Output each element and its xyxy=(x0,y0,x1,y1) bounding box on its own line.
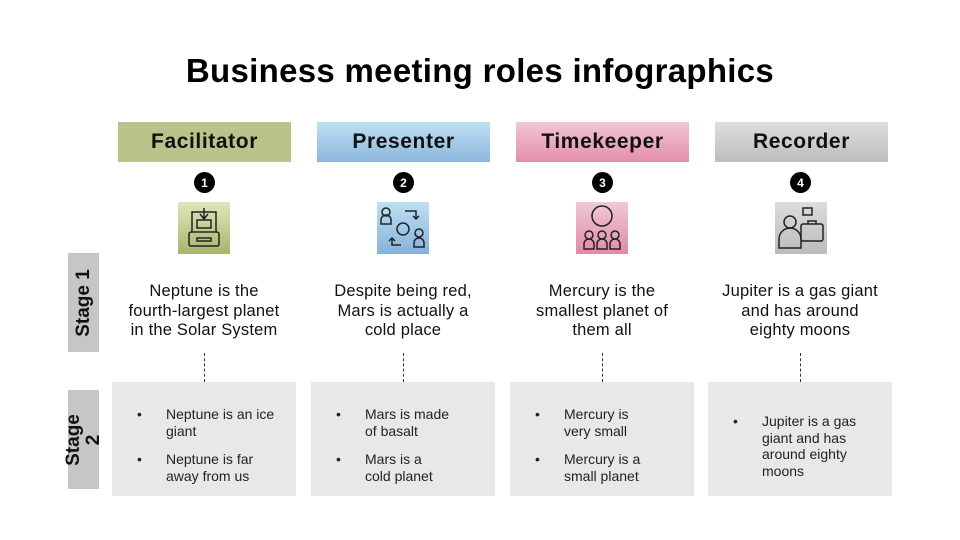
number 1 xyxy=(194,172,215,193)
stage 2 box: Timekeeper: small planet xyxy=(564,468,639,484)
stage 2 box: Timekeeper xyxy=(510,382,694,496)
stage 2 box: Timekeeper: Mercury is a xyxy=(564,451,640,467)
stage 1 label xyxy=(68,253,99,352)
header: Timekeeper xyxy=(516,122,689,162)
stage 2 box: Presenter: Mars is made xyxy=(365,406,449,422)
header: Facilitator xyxy=(118,122,291,162)
stage 2 box: Recorder: giant and has xyxy=(762,430,846,446)
stage 2 box: Presenter: cold planet xyxy=(365,468,433,484)
stage 2 box: Recorder: around eighty xyxy=(762,446,847,462)
stage 2 box: Facilitator xyxy=(112,382,296,496)
stage 2 box: Recorder xyxy=(708,382,892,496)
stage 1 text: Facilitator: Neptune is the xyxy=(149,282,259,300)
stage 1 text: Facilitator: fourth-largest planet xyxy=(129,302,279,320)
stage 1 text: Presenter: cold place xyxy=(365,321,441,339)
number 2 xyxy=(393,172,414,193)
stage 1 text: Presenter: Mars is actually a xyxy=(337,302,469,320)
stage 2 box: Facilitator: Neptune is an ice xyxy=(166,406,274,422)
stage 2 box: Facilitator: away from us xyxy=(166,468,249,484)
stage 2 box: Facilitator: Neptune is far xyxy=(166,451,253,467)
header: Presenter: Presenter xyxy=(352,130,455,153)
header: Recorder: Recorder xyxy=(753,130,850,153)
number 1: 1 xyxy=(201,176,208,190)
stage 1 text: Facilitator xyxy=(128,282,280,339)
number 4 xyxy=(790,172,811,193)
stage 2 box: Recorder: Jupiter is a gas xyxy=(762,413,856,429)
number 3: 3 xyxy=(599,176,606,190)
stage 2 label: 2 xyxy=(82,434,104,445)
icon: inbox tray xyxy=(178,202,230,254)
number 3 xyxy=(592,172,613,193)
icon: exchange people xyxy=(377,202,429,254)
title: Business meeting roles infographics xyxy=(186,52,774,89)
icon: recorder with briefcase xyxy=(775,202,827,254)
stage 1 text: Recorder xyxy=(722,282,878,339)
stage 1 label: Stage 1 xyxy=(72,269,94,336)
number 4: 4 xyxy=(797,176,804,190)
header: Recorder xyxy=(715,122,888,162)
header: Facilitator: Facilitator xyxy=(151,130,258,153)
stage 1 text: Timekeeper: smallest planet of xyxy=(536,302,668,320)
stage 2 box: Timekeeper: very small xyxy=(564,422,627,438)
stage 2 box: Facilitator: giant xyxy=(166,422,196,438)
icon: globe team xyxy=(576,202,628,254)
stage 2 box: Timekeeper: Mercury is xyxy=(564,406,629,422)
stage 2 label xyxy=(68,390,99,489)
stage 1 text: Timekeeper xyxy=(536,282,668,339)
stage 1 text: Recorder: Jupiter is a gas giant xyxy=(722,282,878,300)
stage 1 text: Recorder: and has around xyxy=(741,302,859,320)
stage 1 text: Facilitator: in the Solar System xyxy=(131,321,277,339)
stage 2 box: Presenter: Mars is a xyxy=(365,451,422,467)
number 2: 2 xyxy=(400,176,407,190)
stage 2 label: Stage xyxy=(62,414,84,465)
stage 1 text: Recorder: eighty moons xyxy=(750,321,850,339)
stage 2 box: Recorder: moons xyxy=(762,462,804,478)
stage 2 box: Presenter: of basalt xyxy=(365,422,418,438)
stage 1 text: Timekeeper: them all xyxy=(572,321,632,339)
stage 1 text: Presenter xyxy=(334,282,472,339)
stage 1 text: Presenter: Despite being red, xyxy=(334,282,472,300)
header: Presenter xyxy=(317,122,490,162)
stage 1 text: Timekeeper: Mercury is the xyxy=(549,282,655,300)
stage 2 box: Presenter xyxy=(311,382,495,496)
header: Timekeeper: Timekeeper xyxy=(541,130,664,153)
